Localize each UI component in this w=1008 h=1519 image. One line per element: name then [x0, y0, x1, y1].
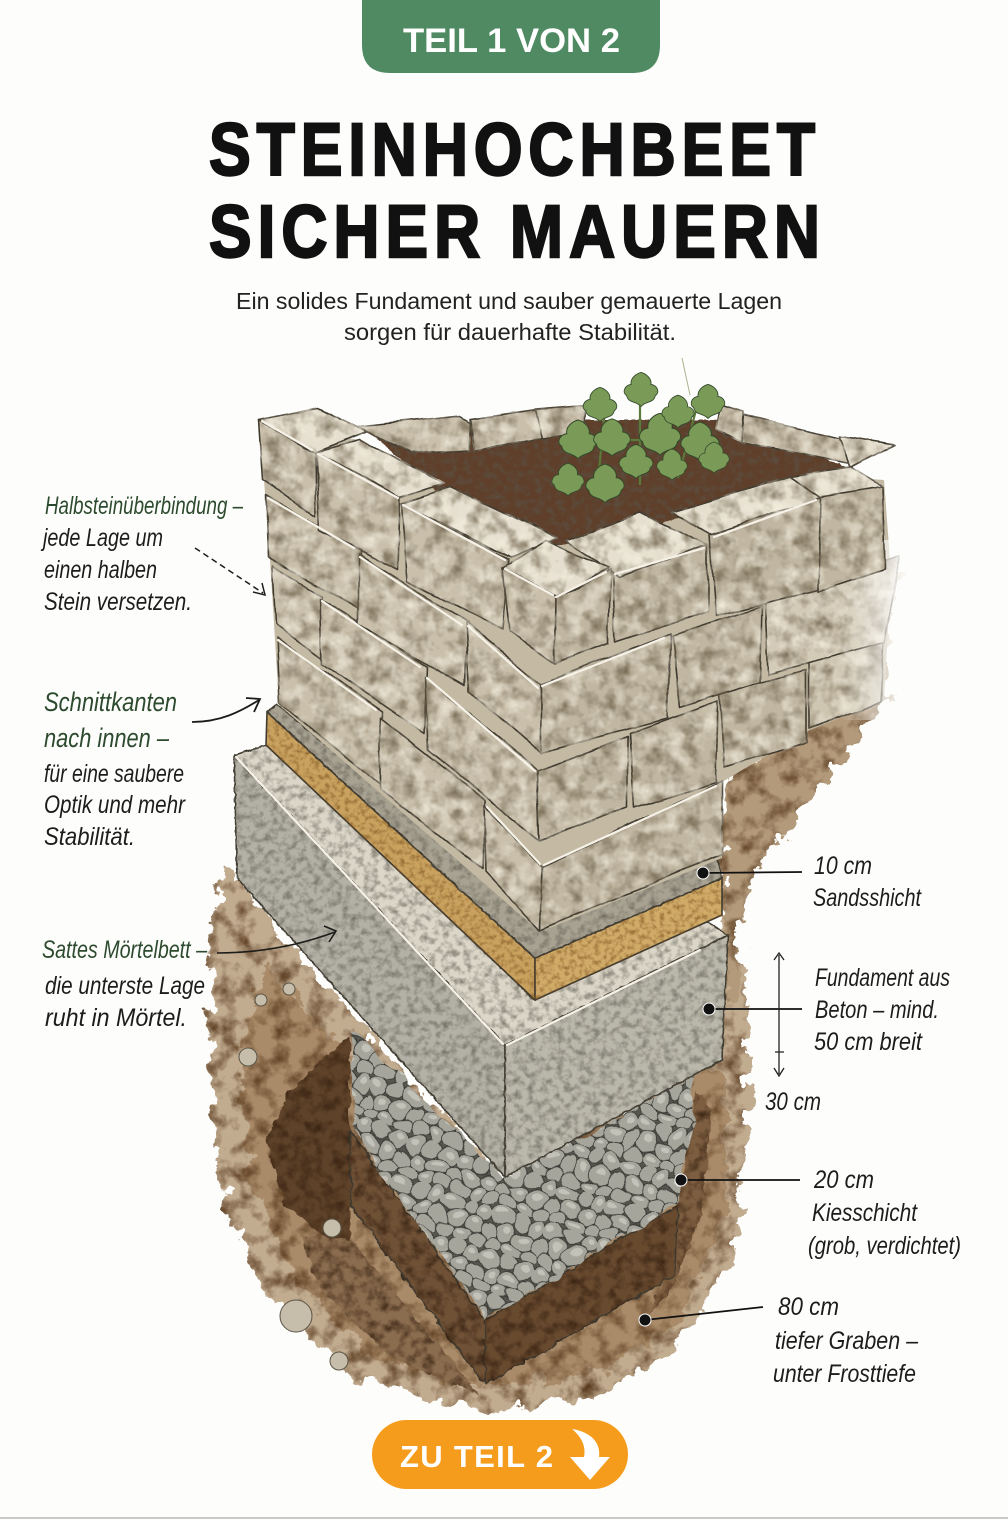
annotation: mortar bed [42, 936, 208, 1032]
annotation: half-stone bond: Stein versetzen. [44, 588, 192, 616]
callout: trench depth: 80 cm [778, 1293, 839, 1321]
callout: gravel layer: Kiesschicht [812, 1199, 918, 1227]
annotation: half-stone bond: jede Lage um [41, 524, 163, 552]
button: to part 2 [372, 1420, 628, 1489]
header tab: part 1 of 2 [362, 0, 660, 73]
callout: trench depth: unter Frosttiefe [773, 1360, 916, 1388]
callout: concrete foundation: 50 cm breit [814, 1028, 923, 1056]
stone edge highlights [236, 421, 816, 1045]
dimension: 30 cm [765, 953, 821, 1116]
wall backing: joints between stones [262, 425, 890, 932]
callout: concrete foundation: Fundament aus [815, 964, 950, 992]
wall: second course [266, 495, 900, 752]
back stones of top course [358, 404, 895, 468]
callout: sand layer: Sandsshicht [813, 884, 922, 912]
left wall stones [259, 408, 558, 630]
callout: sand layer [697, 852, 922, 912]
mortar bed [267, 704, 722, 958]
annotation: cut edges inward: Stabilität. [44, 823, 135, 851]
subtitle [236, 288, 782, 345]
arrow: cut edges [192, 698, 260, 722]
title: STEINHOCHBEET [209, 108, 821, 191]
right end fade of wall [840, 540, 910, 720]
annotation: mortar bed: Sattes Mörtelbett – [42, 936, 208, 964]
subtitle: Ein solides Fundament und sauber gemauerte Lagen [236, 288, 782, 314]
annotation: half-stone bond: einen halben [44, 556, 157, 584]
annotation: cut edges inward: für eine saubere [44, 760, 184, 788]
wall: lowest course [277, 638, 722, 930]
callout: concrete foundation [703, 964, 950, 1056]
annotation: mortar bed: ruht in Mörtel. [45, 1004, 187, 1032]
title [209, 108, 826, 273]
callout: concrete foundation: Beton – mind. [815, 996, 939, 1024]
wall: top course stones [259, 408, 885, 664]
annotation: half-stone bond [41, 492, 244, 616]
annotation: cut edges inward [44, 687, 186, 851]
concrete foundation [234, 745, 728, 1177]
illustration: raised stone bed cross-section [210, 358, 910, 1412]
arrow: mortar bed [217, 926, 336, 953]
annotation: half-stone bond: Halbsteinüberbindung – [45, 492, 244, 520]
gravel layer [352, 1032, 695, 1320]
subtitle: sorgen für dauerhafte Stabilität. [344, 319, 676, 345]
icon: curved down arrow [570, 1429, 610, 1480]
header tab: part 1 of 2: TEIL 1 VON 2 [403, 22, 620, 60]
callout: trench depth: tiefer Graben – [775, 1327, 919, 1355]
annotation: cut edges inward: Schnittkanten [44, 687, 177, 717]
loose pebbles on ground [239, 983, 348, 1370]
callout: trench depth [639, 1293, 919, 1388]
soil block below gravel [350, 1130, 678, 1385]
callout: gravel layer: 20 cm [813, 1166, 874, 1194]
sand layer [266, 712, 722, 1000]
callout: gravel layer: (grob, verdichtet) [808, 1232, 961, 1260]
plants: herb seedlings in bed [552, 358, 729, 503]
annotation: mortar bed: die unterste Lage [45, 972, 205, 1000]
annotation: cut edges inward: Optik und mehr [44, 791, 186, 819]
button: to part 2: ZU TEIL 2 [400, 1439, 553, 1474]
arrow: half-stone bond [195, 548, 265, 595]
title: SICHER MAUERN [209, 190, 826, 273]
corner stone [503, 541, 610, 664]
wall: third course [273, 566, 885, 840]
annotation: cut edges inward: nach innen – [44, 723, 170, 753]
callout: gravel layer [675, 1166, 961, 1260]
planting soil [365, 420, 860, 545]
dimension: 30 cm: 30 cm [765, 1088, 821, 1116]
soil: excavated ground around trench [210, 560, 900, 1412]
right wall stones [567, 467, 885, 642]
callout: sand layer: 10 cm [814, 852, 872, 880]
trench: dark excavated wall [266, 1035, 712, 1395]
